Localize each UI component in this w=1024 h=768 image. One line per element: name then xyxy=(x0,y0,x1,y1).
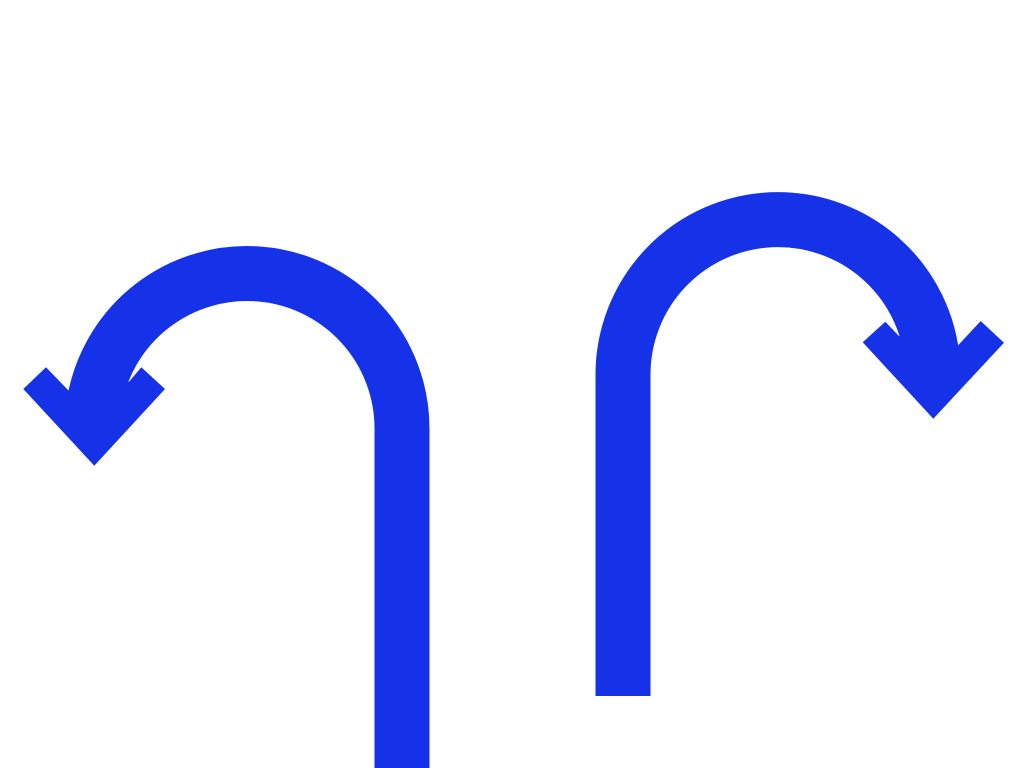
arrow: left U-turn pointing down-left xyxy=(23,274,402,768)
arrow: right U-turn pointing down-right xyxy=(623,220,1004,696)
